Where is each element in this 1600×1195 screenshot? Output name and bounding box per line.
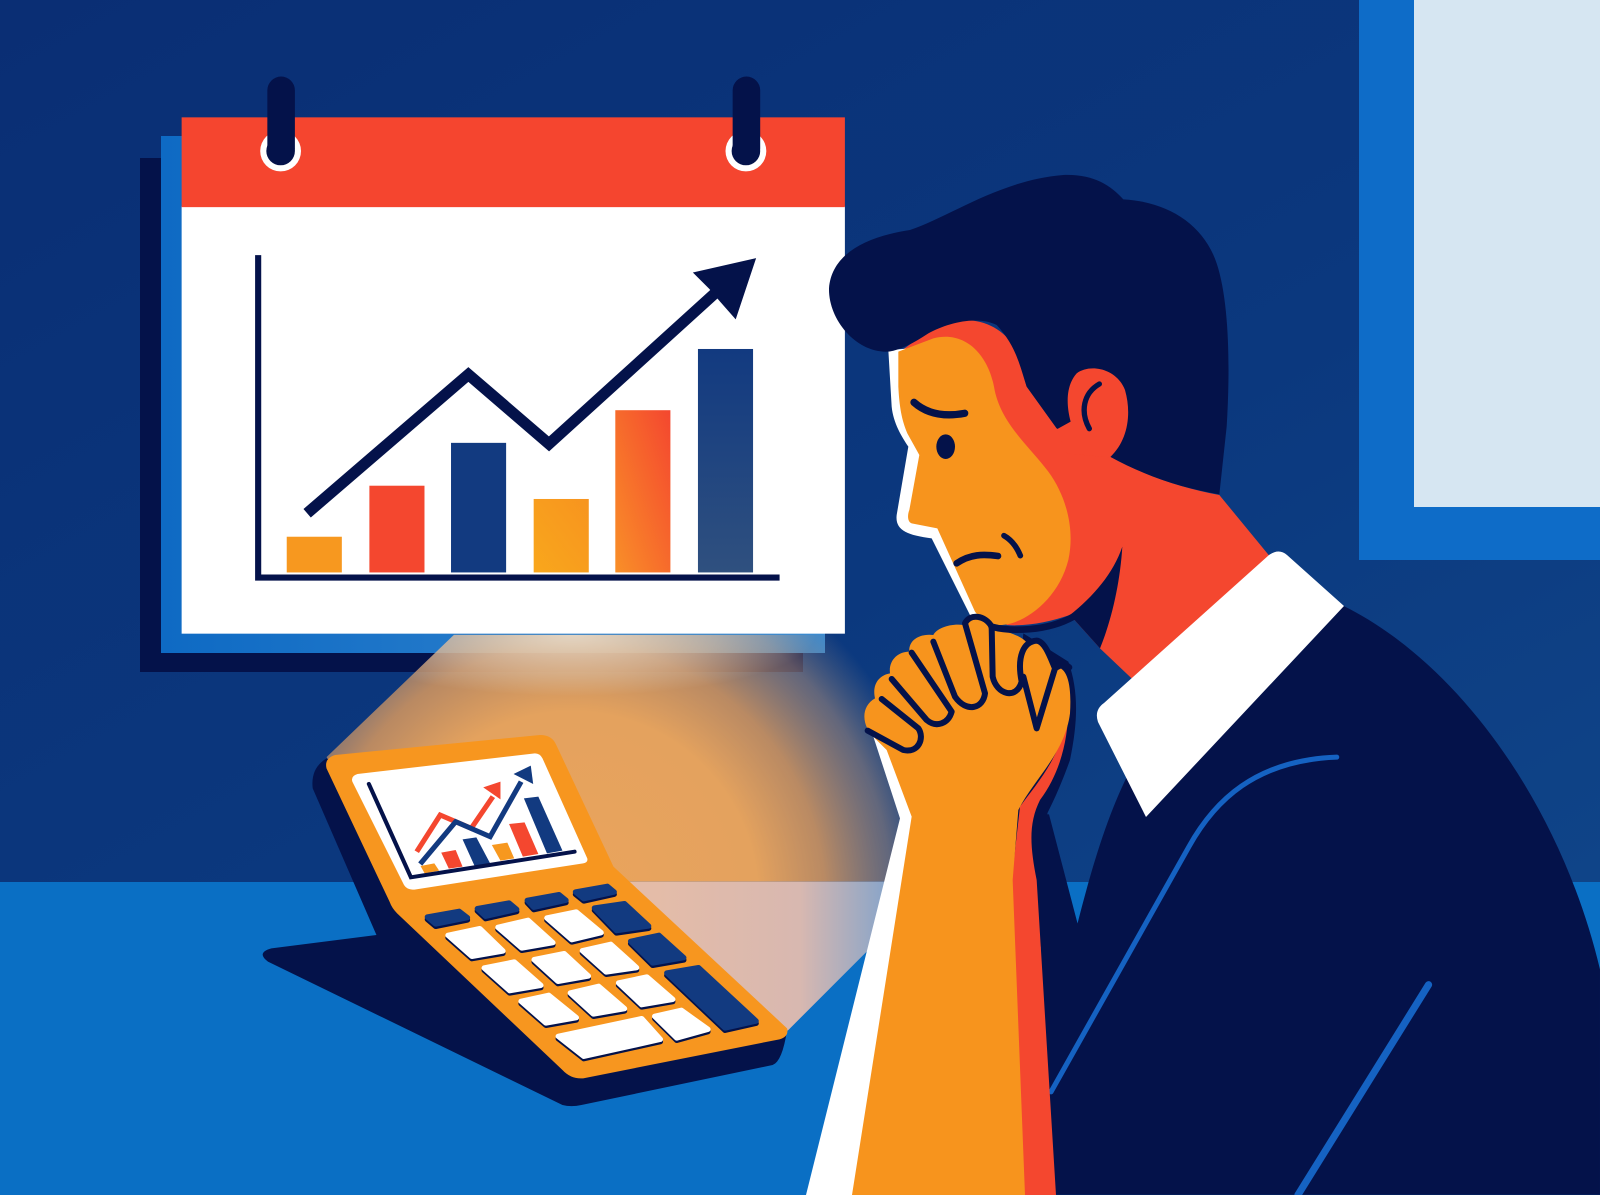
ear [1057, 368, 1128, 457]
calculator [263, 735, 787, 1106]
calculator shadow [263, 758, 787, 1106]
eyebrow [914, 402, 965, 415]
bar chart [258, 255, 780, 578]
calculator key shadows [427, 889, 756, 1059]
suit seam lines [1051, 757, 1429, 1195]
calculator screen [352, 753, 587, 890]
finger outlines [868, 617, 1073, 750]
frowning mouth [957, 555, 998, 563]
forearm shaded strip [1012, 707, 1068, 1195]
mini chart [369, 766, 575, 877]
light beam from calculator [306, 573, 939, 1031]
calendar backing shadow [140, 136, 825, 672]
face [898, 337, 1071, 625]
man: head and neck [829, 175, 1270, 680]
desk [0, 882, 1600, 1195]
man: shirt collar [1097, 552, 1344, 817]
calendar rings [260, 77, 766, 171]
cheek line [1004, 536, 1020, 556]
hair [829, 175, 1229, 494]
calculator white keys [448, 912, 708, 1056]
man: suit jacket [1041, 606, 1600, 1195]
neck and shaded face [900, 320, 1270, 680]
arm outline shadow [1007, 633, 1076, 947]
calculator body [326, 735, 787, 1078]
neck shadow [1070, 547, 1122, 648]
eye [936, 434, 955, 459]
man: hand and forearm [806, 617, 1076, 1195]
calendar [182, 77, 845, 634]
hand and forearm fill [852, 618, 1070, 1195]
calculator dark keys [427, 886, 756, 1028]
rising trend arrow [307, 258, 756, 513]
face profile highlight [888, 347, 1000, 625]
wall background [0, 0, 1600, 882]
sleeve highlight [806, 737, 913, 1195]
window [1359, 0, 1600, 560]
